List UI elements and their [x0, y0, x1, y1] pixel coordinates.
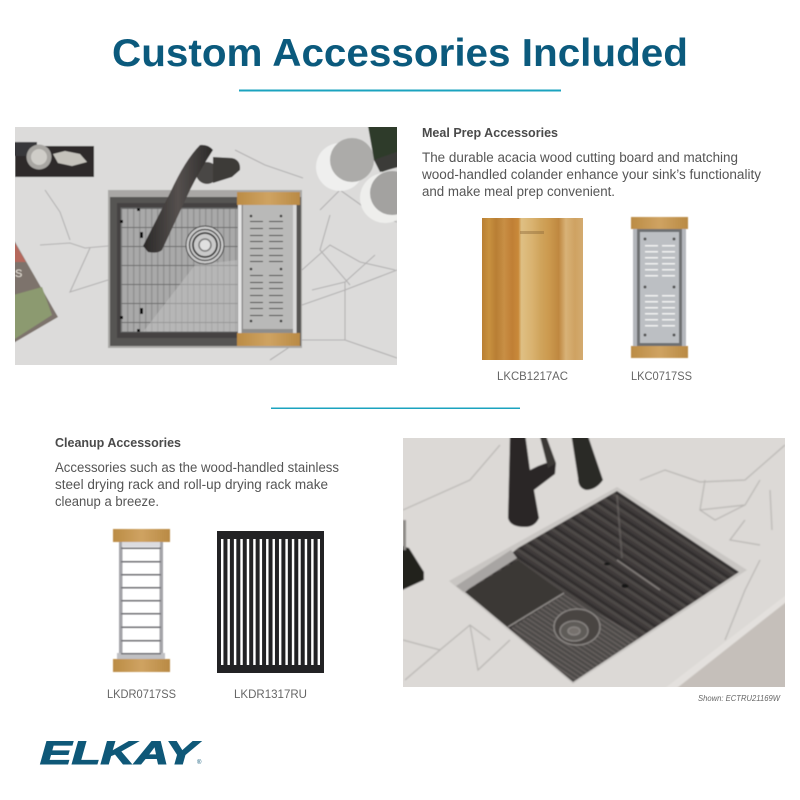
- soap tray: [10, 142, 94, 177]
- sink basin with roll-up mat: [456, 491, 739, 682]
- product: roll-up drying rack: [217, 531, 324, 673]
- text: cleanup description: Accessories such as the wood-handled stainless: [55, 460, 339, 475]
- drain strainer: [554, 609, 600, 645]
- label: LKCB1217AC: LKCB1217AC: [497, 369, 568, 383]
- logo: Elkay: [40, 735, 202, 771]
- heading: cleanup: Cleanup Accessories: [55, 435, 181, 450]
- sink rim: [449, 487, 747, 684]
- text: meal prep description: The durable acacia wood cutting board and matching: [422, 150, 738, 165]
- label: LKDR1317RU: LKDR1317RU: [234, 687, 307, 701]
- product: cutting board: [482, 218, 583, 360]
- cabinet front: [678, 602, 785, 687]
- soap holder: [403, 519, 425, 591]
- caption: model shown: Shown: ECTRU21169W: [698, 693, 781, 703]
- photo: sink with meal prep accessories: [10, 122, 414, 370]
- text: cleanup description: steel drying rack and roll-up drying rack make: [55, 477, 328, 492]
- magazine: [15, 241, 58, 343]
- logo: Elkay: ELKAY: [40, 735, 201, 771]
- text: meal prep description: and make meal prep convenient.: [422, 184, 615, 199]
- title: Custom Accessories Included: [112, 32, 688, 75]
- magazine: S: [15, 268, 22, 280]
- sink basin: [108, 190, 302, 348]
- faucet: [143, 145, 240, 253]
- product: wood-handled drying rack: [113, 529, 170, 672]
- text: meal prep description: wood-handled colander enhance your sink’s functionality: [421, 167, 761, 182]
- logo: Elkay: ®: [197, 759, 202, 766]
- text: meal prep description: [421, 150, 761, 199]
- faucets: [508, 433, 603, 527]
- candles and plant: [316, 127, 397, 223]
- label: LKC0717SS: LKC0717SS: [631, 369, 692, 383]
- drain: [186, 226, 224, 264]
- heading: meal prep: Meal Prep Accessories: [422, 125, 558, 140]
- colander insert: [237, 192, 300, 346]
- product: colander: [631, 217, 688, 358]
- label: LKDR0717SS: LKDR0717SS: [107, 687, 176, 701]
- photo: sink with roll-up rack: [398, 433, 790, 692]
- text: cleanup description: [55, 460, 339, 509]
- text: cleanup description: cleanup a breeze.: [55, 494, 159, 509]
